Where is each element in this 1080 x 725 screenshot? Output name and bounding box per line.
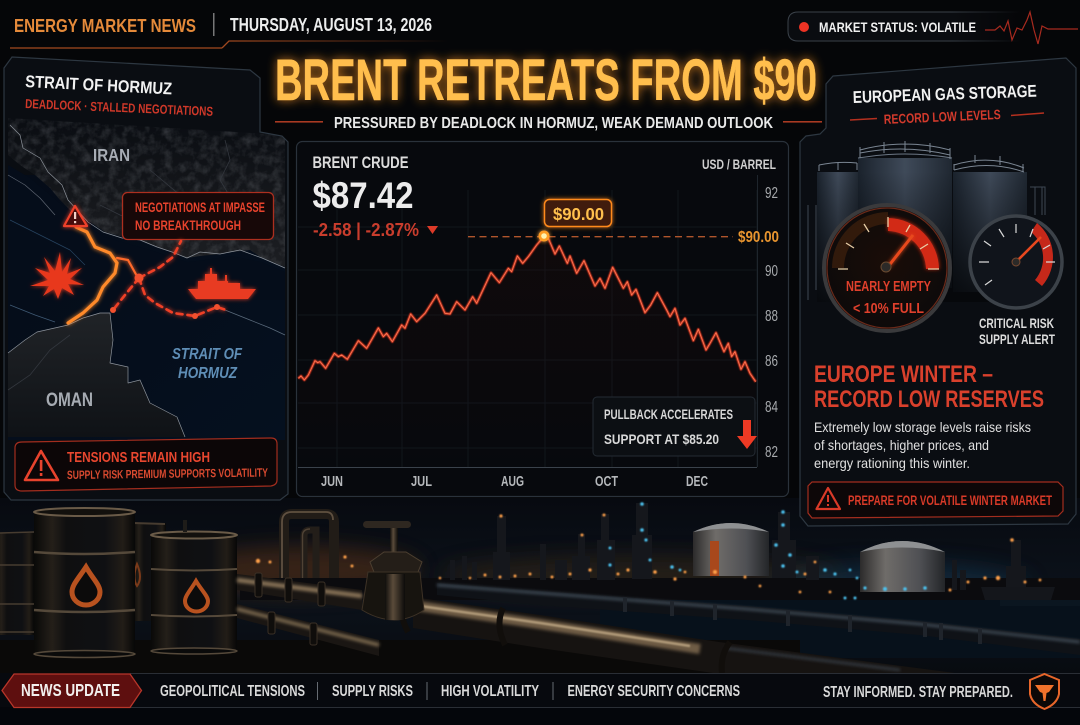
ticker items: HIGH VOLATILITY: [441, 683, 539, 700]
pipes and valve: [237, 512, 1080, 673]
x axis labels: JUL: [411, 474, 432, 490]
alert: prepare for volatile market: [808, 482, 1063, 518]
x axis labels: JUN: [321, 474, 343, 490]
callout: negotiations: NEGOTIATIONS AT IMPASSE: [135, 200, 265, 215]
chart header: [312, 153, 438, 240]
heading: europe winter: EUROPE WINTER –: [814, 361, 993, 388]
ticker items: ENERGY SECURITY CONCERNS: [568, 683, 740, 700]
y axis labels: 86: [765, 353, 778, 370]
vertical arches: [282, 512, 334, 578]
gauge caption: [979, 315, 1055, 347]
alert: tensions remain high: SUPPLY RISK PREMIUM SUPPORTS VOLATILITY: [67, 466, 268, 482]
chart header: -2.58 | -2.87%: [313, 220, 419, 240]
subheading: RECORD LOW LEVELS: [883, 107, 1001, 127]
axis unit: USD / BARREL: [702, 156, 776, 172]
main pipe: [402, 594, 955, 673]
icon: ship: [188, 268, 256, 299]
gauge: nearly empty: < 10% FULL: [853, 300, 924, 317]
peak marker: [538, 230, 550, 242]
chart header: $87.42: [312, 175, 414, 216]
price line: [298, 236, 756, 467]
map: [8, 118, 285, 440]
body text: Extremely low storage levels raise risks: [814, 419, 1031, 435]
header brand: ENERGY MARKET NEWS: [14, 15, 196, 36]
ticker items: [160, 683, 740, 700]
heading: STRAIT OF HORMUZ: [25, 72, 173, 98]
callout: negotiations: NO BREAKTHROUGH: [135, 218, 241, 233]
gauge: nearly empty: NEARLY EMPTY: [846, 278, 931, 295]
subtitle: PRESSURED BY DEADLOCK IN HORMUZ, WEAK DEMAND OUTLOOK: [334, 115, 773, 132]
mid pipe: [237, 574, 362, 610]
alert: tensions remain high: TENSIONS REMAIN HIGH: [67, 449, 210, 466]
y axis labels: 90: [765, 263, 778, 280]
icon: shield: [1030, 674, 1059, 709]
icon: down arrow: [737, 420, 757, 449]
panel: brent crude chart: [296, 142, 788, 496]
label: strait of hormuz on water: HORMUZ: [178, 365, 238, 382]
icon: warning triangle on map: [64, 206, 87, 226]
valve: [362, 521, 424, 620]
alert: tensions remain high: [15, 438, 277, 491]
footer news bar: [0, 673, 1080, 725]
gauge: critical risk: [970, 216, 1062, 308]
icon: explosion: [30, 252, 84, 299]
gauge: nearly empty: [824, 205, 950, 331]
pullback callout: SUPPORT AT $85.20: [604, 431, 719, 447]
y axis labels: 82: [765, 444, 778, 461]
x axis labels: [321, 474, 708, 490]
far pipe: [436, 582, 1080, 646]
y axis labels: 92: [765, 185, 778, 202]
panel: european gas storage: [800, 58, 1076, 526]
gauge needle: [887, 235, 913, 268]
header date: THURSDAY, AUGUST 13, 2026: [230, 15, 432, 35]
y axis labels: 84: [765, 399, 778, 416]
label: iran: IRAN: [93, 145, 130, 165]
callout: negotiations: [122, 192, 274, 240]
y axis labels: [765, 185, 778, 461]
bottom industrial scene: [0, 498, 1080, 673]
pullback callout: [593, 397, 757, 456]
chart header: BRENT CRUDE: [312, 153, 408, 172]
ticker items: GEOPOLITICAL TENSIONS: [160, 683, 305, 700]
lower pipe: [237, 604, 379, 656]
storage tanks: [808, 141, 1045, 302]
subheading: DEADLOCK · STALLED NEGOTIATIONS: [25, 96, 214, 119]
label: oman: OMAN: [46, 390, 93, 411]
pullback callout: PULLBACK ACCELERATES: [604, 406, 733, 422]
icon: heartbeat line: [985, 12, 1078, 44]
barrels: [0, 508, 237, 658]
heading: europe winter: [814, 361, 1044, 413]
body text: [814, 419, 1031, 471]
title: BRENT RETREATS FROM $90: [275, 48, 817, 113]
body text: of shortages, higher prices, and: [814, 437, 989, 453]
icon: warning: [25, 451, 58, 480]
x axis labels: AUG: [501, 474, 524, 490]
heading: EUROPEAN GAS STORAGE: [852, 82, 1037, 107]
gauge caption: CRITICAL RISK: [979, 315, 1054, 331]
header: [10, 13, 448, 48]
market status pill: [788, 12, 1078, 44]
y axis labels: 88: [765, 308, 778, 325]
label: strait of hormuz on water: [172, 346, 243, 382]
x axis labels: DEC: [686, 474, 708, 490]
news update badge: [2, 674, 142, 708]
refinery skyline: [256, 502, 1055, 600]
x axis labels: OCT: [595, 474, 618, 490]
market status pill: MARKET STATUS: VOLATILE: [819, 19, 976, 35]
shipping routes: [68, 227, 226, 323]
body text: energy rationing this winter.: [814, 455, 970, 471]
news update badge: NEWS UPDATE: [21, 680, 120, 700]
$90 reference line: $90.00: [738, 229, 779, 246]
panel: strait of hormuz: [4, 57, 288, 500]
peak callout: $90.00: [553, 204, 604, 224]
label: strait of hormuz on water: STRAIT OF: [172, 346, 243, 363]
ticker items: SUPPLY RISKS: [332, 683, 413, 700]
peak callout: [544, 200, 612, 226]
